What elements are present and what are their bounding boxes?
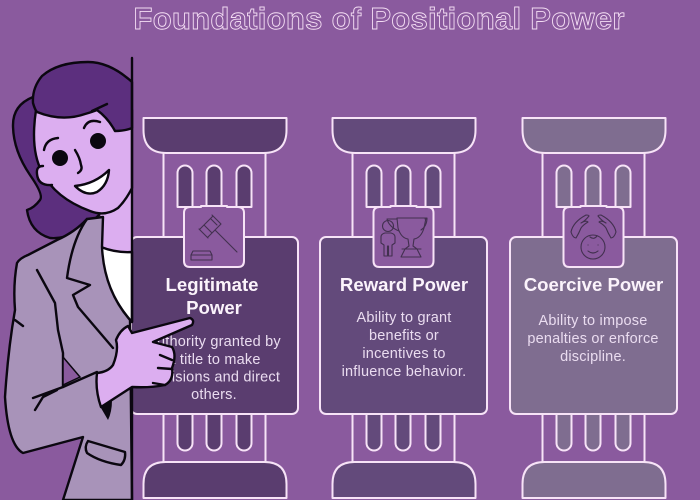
lapel shadow <box>63 357 80 385</box>
back hair <box>13 97 110 238</box>
nose <box>75 150 82 173</box>
cuff shadow <box>101 400 112 420</box>
description: Ability to impose <box>539 313 647 329</box>
description: incentives to <box>362 346 446 362</box>
heading: Legitimate <box>166 274 258 295</box>
vertical divider line <box>131 58 133 500</box>
heading: Coercive Power <box>524 274 663 295</box>
eyebrows <box>44 121 100 150</box>
description: a title to make <box>167 352 261 368</box>
pillar: coercive power <box>510 118 677 498</box>
ear <box>37 166 52 185</box>
lapel and sleeve creases <box>15 219 113 387</box>
sleeve top and cuff frill <box>33 372 97 410</box>
smile <box>75 170 109 194</box>
description: Ability to grant <box>356 310 452 326</box>
white shirt <box>101 247 132 322</box>
description: Authority granted by <box>147 334 281 350</box>
icon tile: gavel <box>184 206 244 267</box>
pillar: legitimate power <box>131 118 298 498</box>
description: others. <box>191 387 237 403</box>
description: benefits or <box>369 328 439 344</box>
jacket body <box>5 217 132 500</box>
heading: Power <box>186 297 242 318</box>
description: decisions and direct <box>148 370 280 386</box>
pocket <box>86 441 125 465</box>
pillar: reward power <box>320 118 487 498</box>
title: Foundations of Positional Power <box>134 1 624 36</box>
icon tile: hands and baby <box>564 206 624 267</box>
description: penalties or enforce <box>527 331 659 347</box>
eyes <box>52 150 68 166</box>
pillar structure <box>320 118 487 498</box>
pillar structure <box>131 118 298 498</box>
character: woman pointing <box>5 58 193 500</box>
heading: Reward Power <box>340 274 468 295</box>
pointing hand <box>96 318 193 407</box>
neck and chest skin <box>100 170 132 252</box>
pillar structure <box>510 118 677 498</box>
front hair <box>33 62 132 131</box>
finger creases <box>153 355 172 385</box>
fringe tip <box>92 104 107 111</box>
icon tile: person and trophy <box>374 206 434 267</box>
description: influence behavior. <box>342 364 466 380</box>
description: discipline. <box>560 349 626 365</box>
face <box>34 90 132 213</box>
